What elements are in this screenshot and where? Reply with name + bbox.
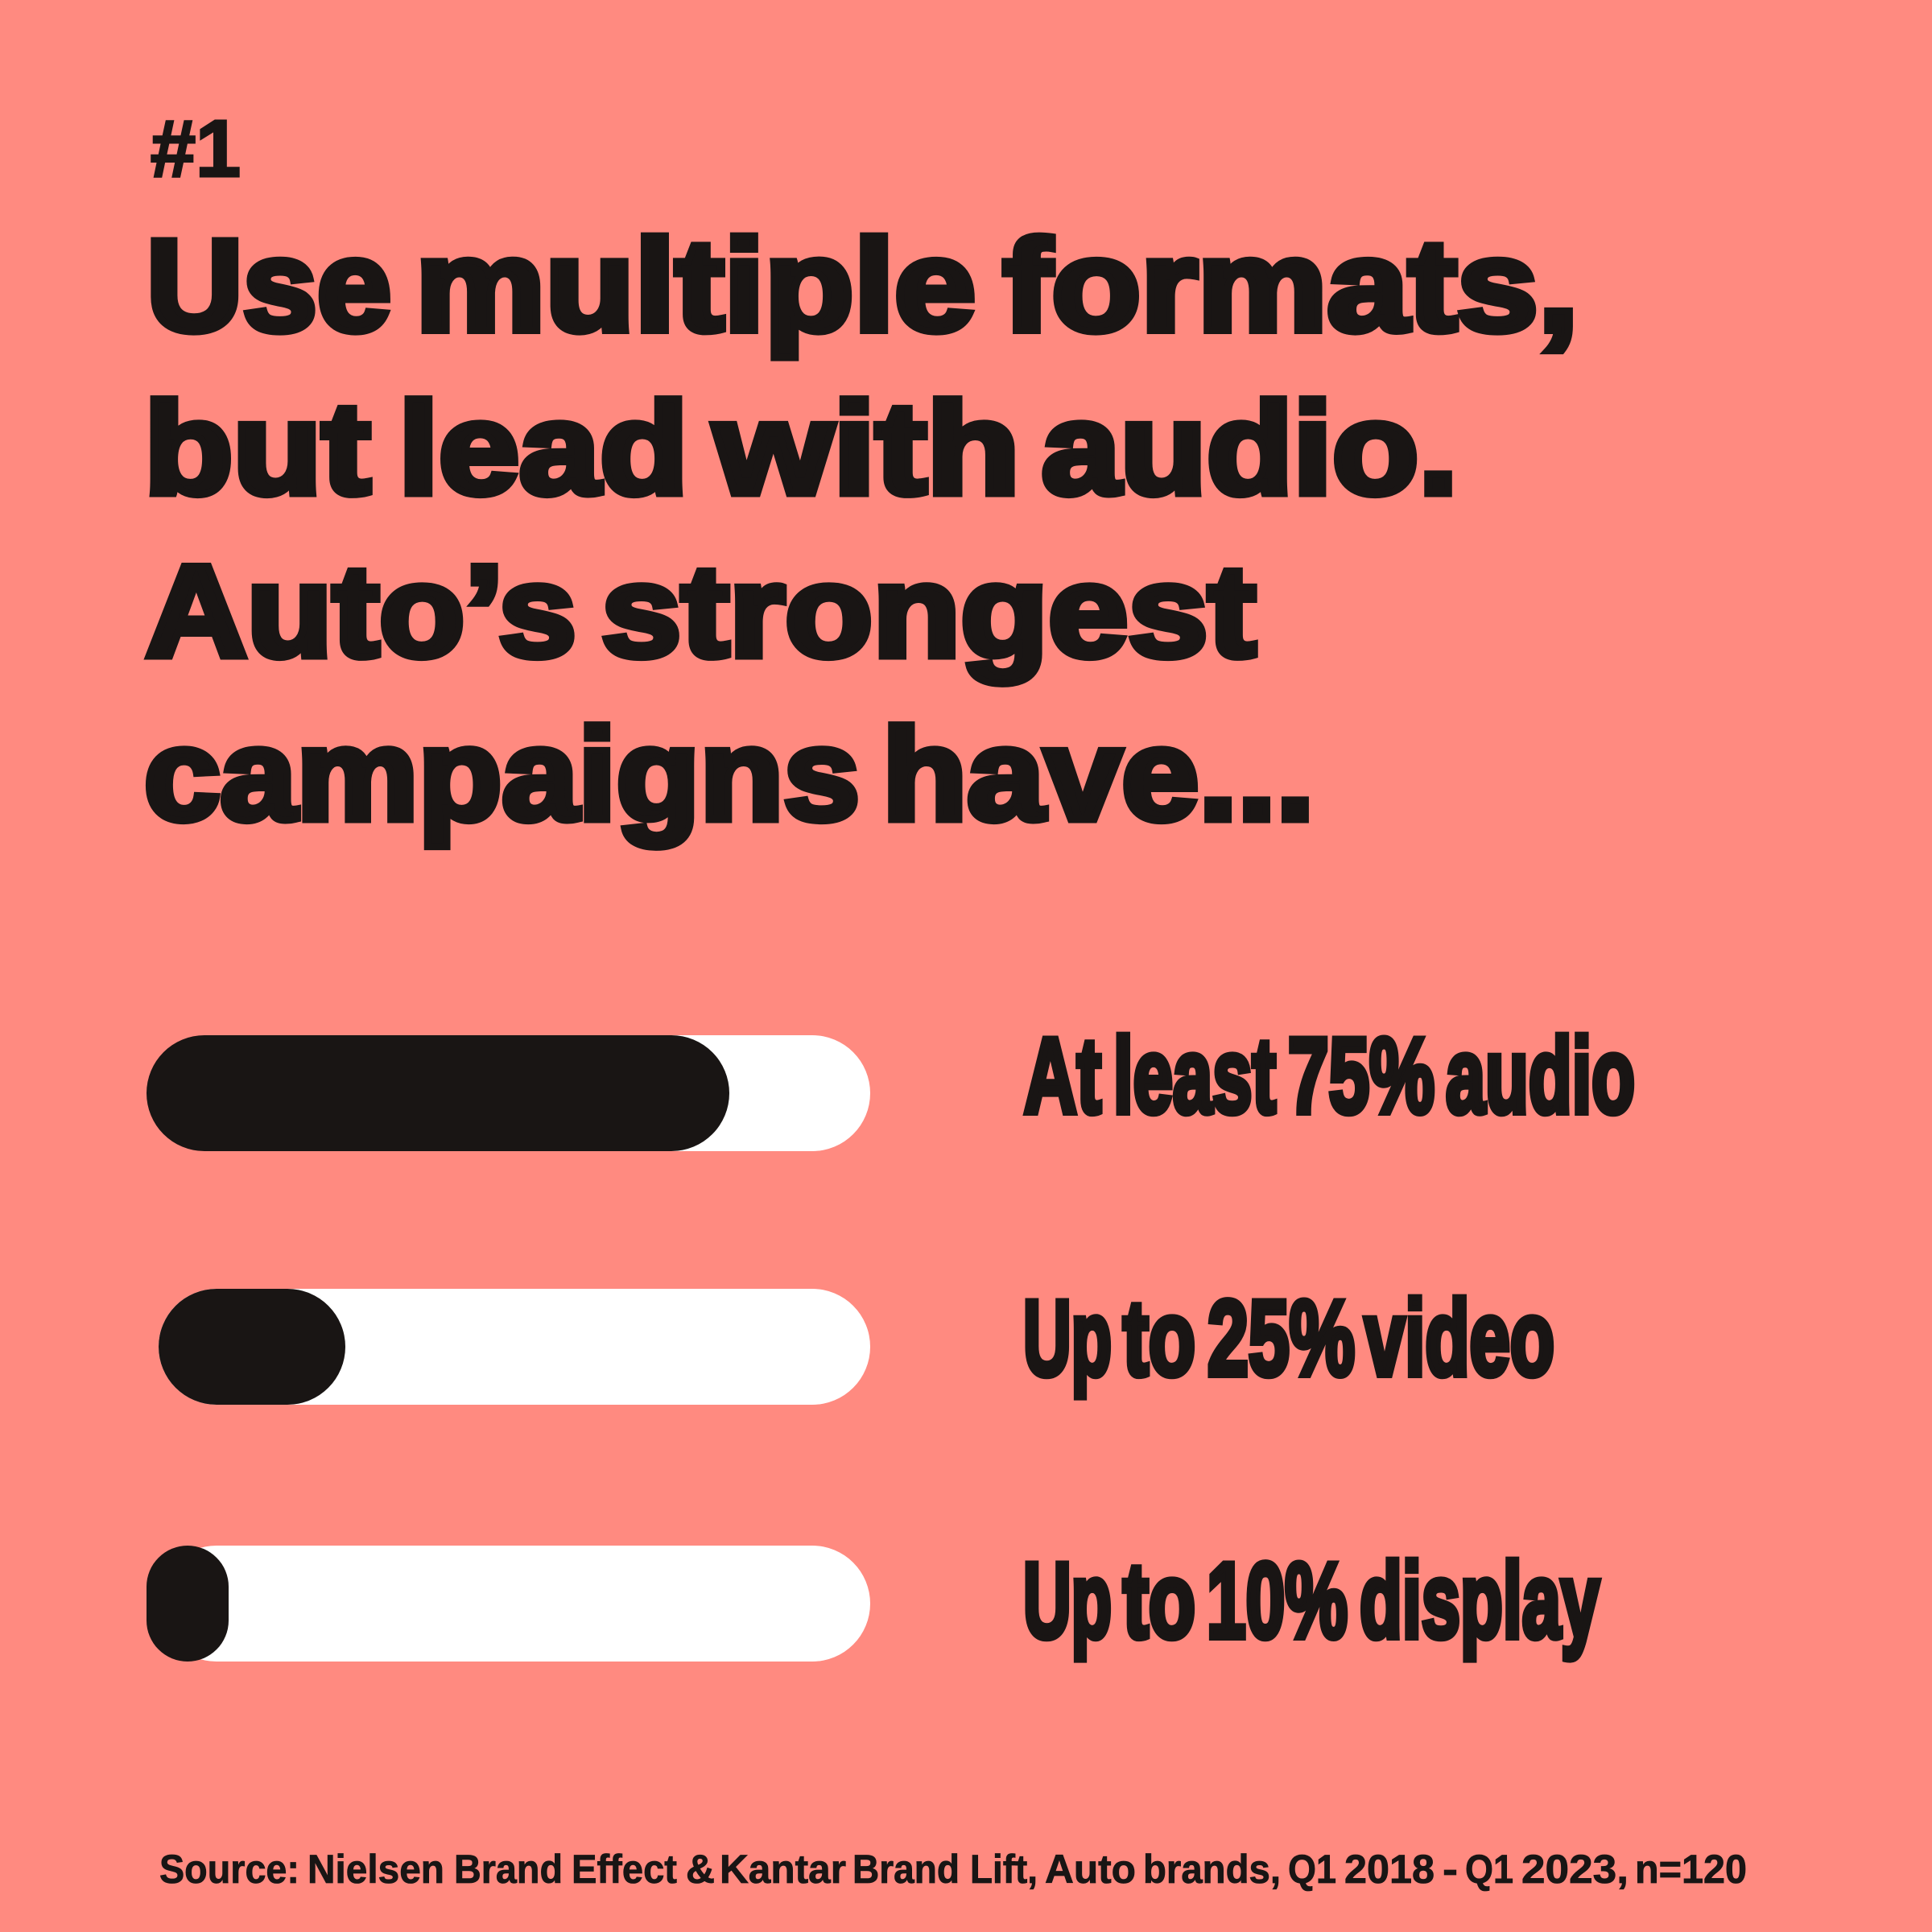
source note: Nielsen (308, 1847, 444, 1892)
heading: strongest (601, 539, 1256, 684)
label: video (1023, 1279, 1554, 1398)
bar: video 25% (159, 1289, 870, 1405)
heading: lead (398, 376, 688, 522)
source note: Source: (159, 1847, 299, 1892)
heading: audio. (1042, 376, 1458, 522)
label: video: to (1123, 1279, 1195, 1398)
heading: but (144, 376, 370, 522)
label: audio: audio (1446, 1017, 1635, 1136)
heading: Auto’s (146, 539, 576, 684)
label: display: to (1123, 1542, 1195, 1661)
source note: Effect (572, 1847, 677, 1892)
source note: Q1 (1288, 1847, 1336, 1892)
label: display: Up (1023, 1542, 1112, 1661)
heading: campaigns (144, 702, 860, 848)
source note: - (1443, 1847, 1458, 1892)
heading: multiple (415, 213, 976, 359)
heading (144, 213, 1579, 848)
bar: audio 75% (147, 1035, 870, 1151)
source note: Brand (852, 1847, 960, 1892)
source note: 2023, (1521, 1847, 1629, 1892)
source note: Brand (454, 1847, 563, 1892)
label: video: 25% (1208, 1279, 1355, 1398)
label: audio: least (1113, 1017, 1276, 1136)
heading: formats, (1003, 213, 1579, 359)
label: audio: At (1024, 1017, 1101, 1136)
source note: Q1 (1465, 1847, 1513, 1892)
label: video: video (1364, 1279, 1554, 1398)
label: display: display (1360, 1542, 1600, 1661)
source note: Kantar (720, 1847, 846, 1892)
source note: brands, (1143, 1847, 1281, 1892)
heading: with (713, 376, 1020, 522)
label: audio: 75% (1288, 1017, 1435, 1136)
source note: Auto (1045, 1847, 1136, 1892)
bar: display 10% (147, 1546, 870, 1662)
heading: have... (882, 702, 1315, 848)
label: audio (1024, 1017, 1635, 1136)
tip number: #1 (151, 104, 241, 194)
source note: 2018 (1344, 1847, 1435, 1892)
label: display: 10% (1207, 1542, 1348, 1661)
heading: Use (147, 213, 391, 359)
source note: n=120 (1635, 1847, 1747, 1892)
source note: & (686, 1847, 715, 1892)
label: video: Up (1023, 1279, 1112, 1398)
source note: Lift, (970, 1847, 1038, 1892)
label: display (1023, 1542, 1600, 1661)
source note (159, 1847, 1747, 1892)
